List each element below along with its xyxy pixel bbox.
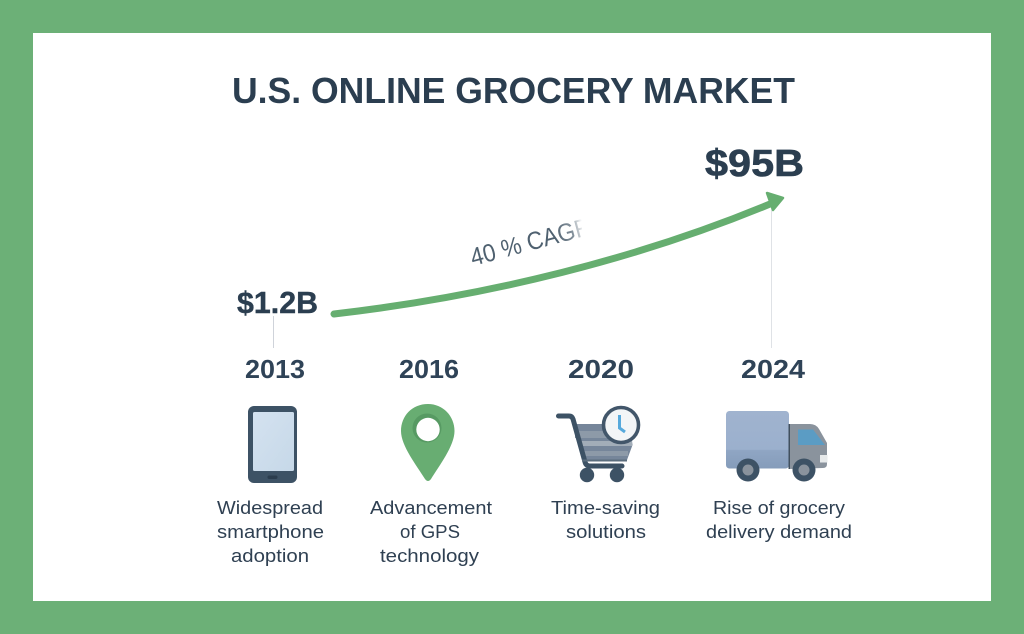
caption: time-saving solutions: solutions xyxy=(566,521,646,542)
caption: time-saving solutions xyxy=(551,497,660,542)
caption: time-saving solutions: Time-saving xyxy=(551,497,660,518)
value: 2013 market size: $1.2B xyxy=(237,285,318,320)
label: CAGR: 40 % CAGR xyxy=(467,213,594,272)
title: U.S. ONLINE GROCERY MARKET xyxy=(232,70,795,111)
icon: location pin xyxy=(401,404,454,481)
value: 2024 market size: $95B xyxy=(705,143,804,185)
year: 2016: 2016 xyxy=(399,354,459,384)
caption: GPS technology: technology xyxy=(380,545,480,566)
year: 2024: 2024 xyxy=(741,354,806,384)
leader line: 2013 xyxy=(272,316,274,348)
caption: GPS technology: of GPS xyxy=(400,521,460,542)
caption: grocery delivery demand: delivery demand xyxy=(706,521,852,542)
caption: smartphone adoption xyxy=(217,497,324,566)
icon: shopping cart with clock xyxy=(558,408,638,482)
caption: smartphone adoption: adoption xyxy=(231,545,309,566)
year: 2020: 2020 xyxy=(568,354,634,384)
caption: smartphone adoption: smartphone xyxy=(217,521,324,542)
caption: smartphone adoption: Widespread xyxy=(217,497,323,518)
growth arrow xyxy=(334,193,783,314)
icon: delivery truck xyxy=(726,411,828,482)
caption: grocery delivery demand: Rise of grocery xyxy=(713,497,846,518)
year: 2013: 2013 xyxy=(245,354,305,384)
caption: grocery delivery demand xyxy=(706,497,852,542)
caption: GPS technology: Advancement xyxy=(370,497,492,518)
leader line: 2024 xyxy=(770,208,772,348)
caption: GPS technology xyxy=(370,497,492,566)
icon: smartphone xyxy=(248,406,297,483)
